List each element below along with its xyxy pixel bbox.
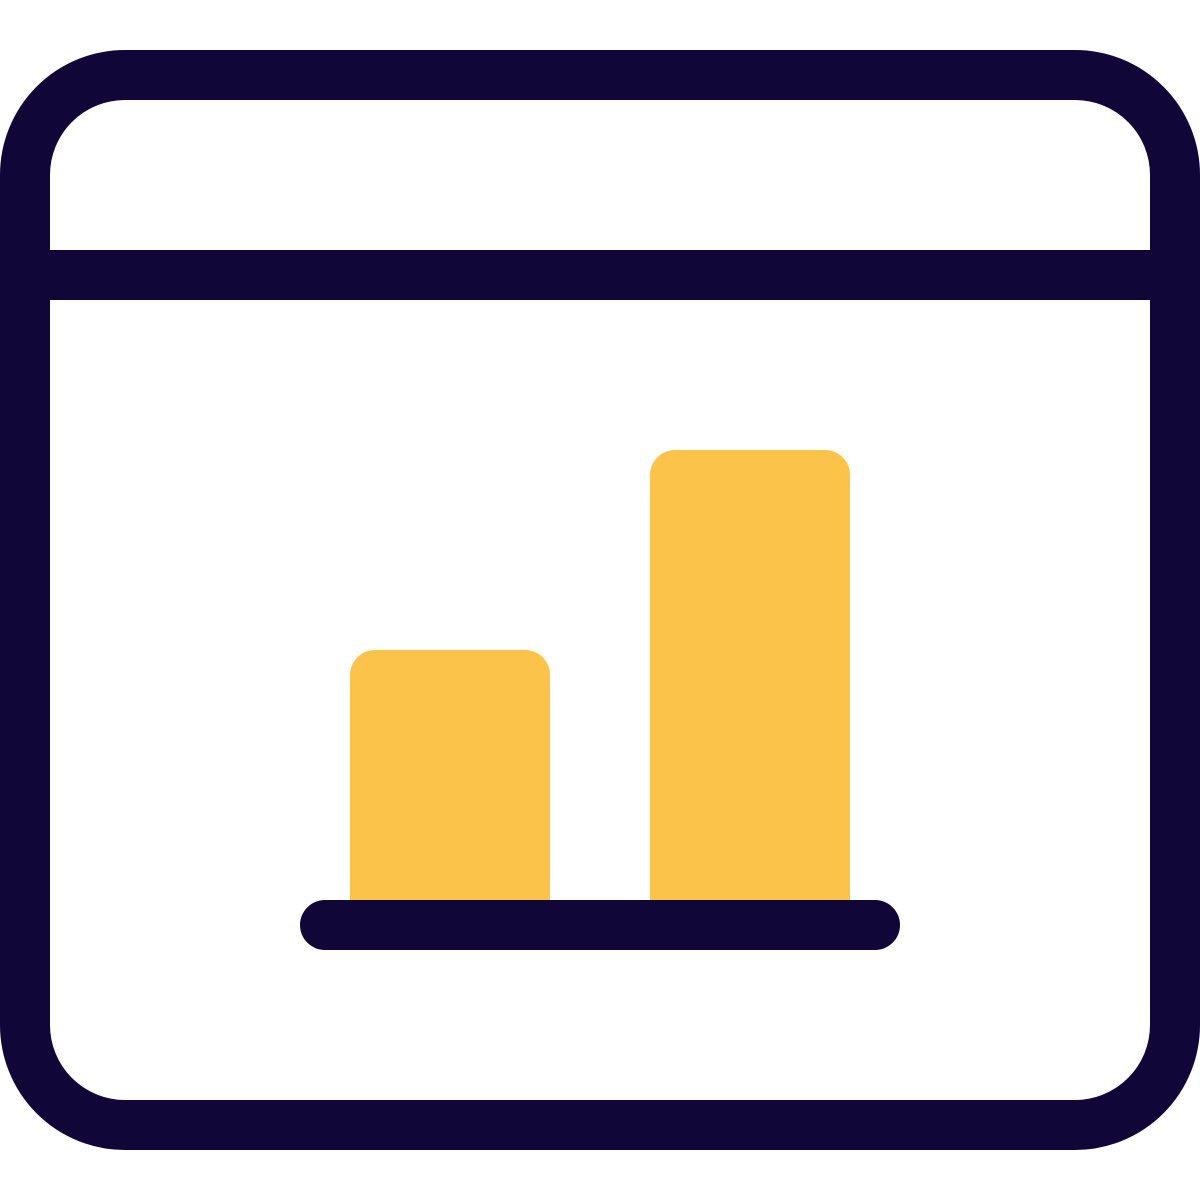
short bar: [350, 650, 550, 900]
window title bar divider: [25, 250, 1175, 300]
tall bar: [650, 450, 850, 900]
bar chart: [300, 450, 900, 950]
chart baseline: [300, 900, 900, 950]
